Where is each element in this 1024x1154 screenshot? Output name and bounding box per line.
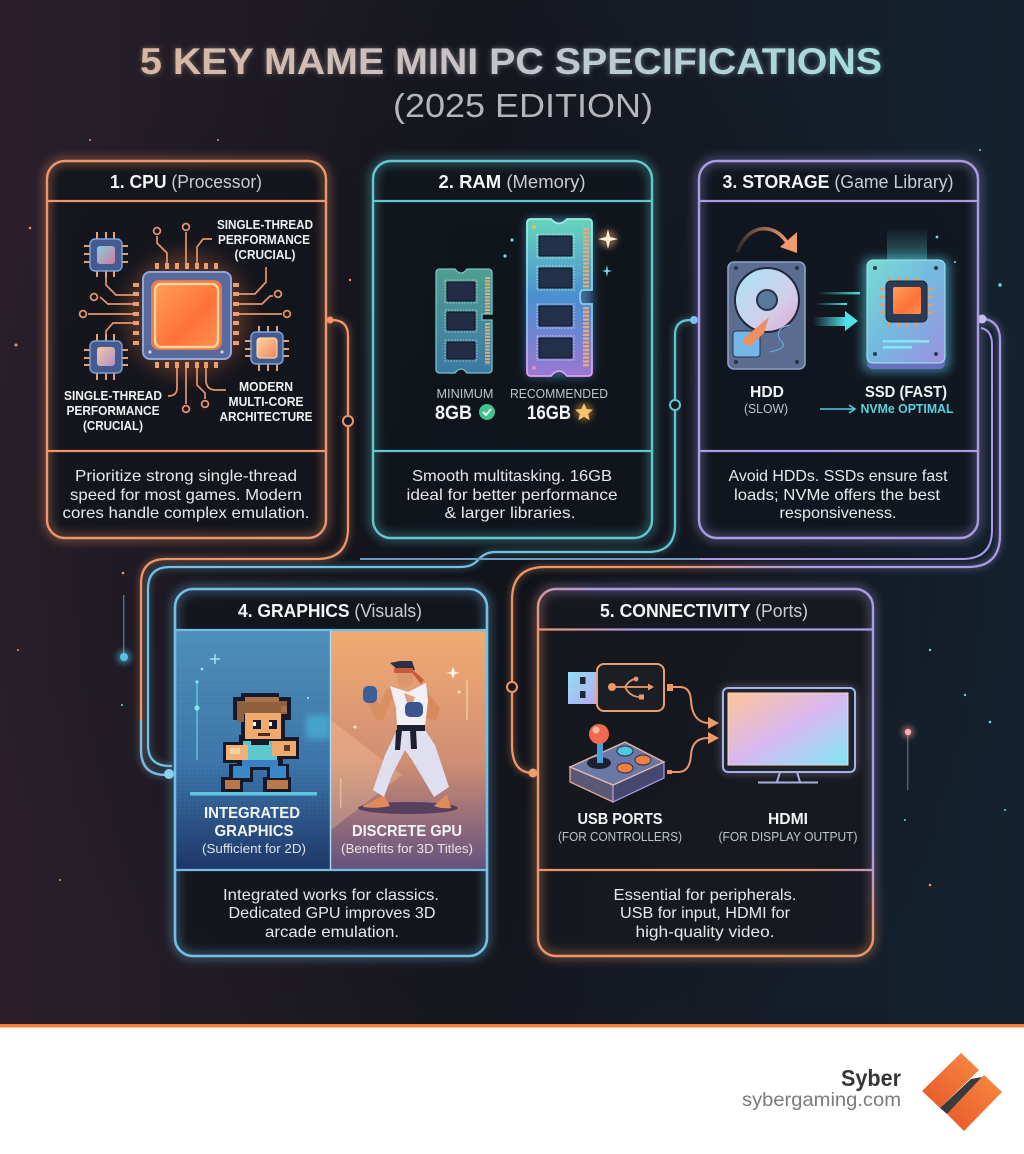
description: Storage: loads; NVMe offers the best bbox=[734, 487, 941, 504]
description: Storage: responsiveness. bbox=[780, 505, 896, 522]
label: modern multi-core: MULTI-CORE bbox=[228, 395, 304, 409]
label: integrated graphics bbox=[202, 805, 306, 856]
panel: Storage bbox=[699, 161, 978, 538]
label: recommended 16GB bbox=[510, 387, 608, 424]
heading: Connectivity: 5. CONNECTIVITY (Ports) bbox=[600, 601, 808, 621]
panel: integrated graphics bbox=[175, 630, 330, 870]
label: HDMI bbox=[718, 811, 858, 844]
label: minimum 8GB bbox=[435, 387, 495, 424]
description: Graphics: arcade emulation. bbox=[265, 924, 399, 941]
brand name: Syber bbox=[841, 1065, 901, 1091]
heading: RAM: 2. RAM (Memory) bbox=[438, 172, 586, 192]
description: Connectivity: Essential for peripherals. bbox=[614, 887, 796, 904]
description: CPU: Prioritize strong single-thread bbox=[75, 468, 297, 485]
label: USB ports: USB PORTS bbox=[578, 811, 662, 828]
title: 5 KEY MAME MINI PC SPECIFICATIONS bbox=[140, 41, 882, 82]
panel: Connectivity bbox=[538, 589, 873, 956]
icon: HDD bbox=[728, 229, 805, 369]
label: recommended 16GB: RECOMMENDED bbox=[510, 387, 608, 401]
label: integrated graphics: (Sufficient for 2D) bbox=[202, 842, 306, 856]
label: integrated graphics: GRAPHICS bbox=[214, 823, 294, 840]
description: RAM: Smooth multitasking. 16GB bbox=[412, 468, 612, 485]
icon: small chip top left bbox=[84, 232, 128, 277]
label: single-thread bottom: SINGLE-THREAD bbox=[64, 389, 162, 403]
icon: sparkles bbox=[503, 229, 618, 277]
connector: Storage to Graphics bbox=[148, 316, 698, 766]
label: HDMI: (FOR DISPLAY OUTPUT) bbox=[718, 830, 858, 844]
icon: USB connector bbox=[568, 664, 664, 711]
label: USB ports bbox=[558, 811, 682, 844]
label: discrete GPU: DISCRETE GPU bbox=[352, 823, 462, 840]
icon: small 8GB RAM stick bbox=[436, 269, 492, 373]
icon: pixel fighter bbox=[221, 693, 299, 792]
heading: Graphics: 4. GRAPHICS (Visuals) bbox=[238, 601, 422, 621]
label: HDMI: HDMI bbox=[768, 811, 808, 828]
label: single-thread top: (CRUCIAL) bbox=[234, 248, 296, 262]
icon: gold star bbox=[575, 403, 593, 421]
title bbox=[140, 41, 882, 124]
description: CPU: cores handle complex emulation. bbox=[62, 505, 310, 522]
description: CPU: speed for most games. Modern bbox=[70, 487, 302, 504]
connector: CPU to Graphics bbox=[141, 316, 353, 779]
icon: logo bbox=[922, 1053, 1002, 1131]
label: SSD fast bbox=[820, 384, 954, 416]
label: minimum 8GB: MINIMUM bbox=[436, 387, 494, 401]
heading: Storage: 3. STORAGE (Game Library) bbox=[722, 172, 954, 192]
background particles bbox=[14, 139, 1006, 886]
label: HDD slow bbox=[744, 384, 788, 416]
description: RAM: ideal for better performance bbox=[406, 487, 618, 504]
label: SSD fast: NVMe OPTIMAL bbox=[860, 402, 954, 416]
description: Graphics: Dedicated GPU improves 3D bbox=[228, 905, 436, 922]
description: Graphics: Integrated works for classics. bbox=[223, 887, 439, 904]
connector: Storage to Connectivity bbox=[360, 314, 1000, 778]
panel: CPU bbox=[47, 161, 326, 538]
label: single-thread top: PERFORMANCE bbox=[218, 233, 310, 247]
label: modern multi-core: ARCHITECTURE bbox=[220, 410, 312, 424]
title: (2025 EDITION) bbox=[393, 87, 653, 124]
label: single-thread bottom: PERFORMANCE bbox=[66, 404, 160, 418]
description: RAM: & larger libraries. bbox=[444, 505, 576, 522]
icon: karate fighter bbox=[358, 661, 458, 814]
label: integrated graphics: INTEGRATED bbox=[204, 805, 300, 822]
brand url: sybergaming.com bbox=[742, 1089, 901, 1111]
icon: green check bbox=[479, 404, 495, 420]
icon: small chip right bbox=[245, 326, 289, 371]
description: Storage: Avoid HDDs. SSDs ensure fast bbox=[728, 468, 948, 485]
label: HDD slow: HDD bbox=[750, 384, 784, 401]
label: modern multi-core: MODERN bbox=[239, 380, 293, 394]
icon: arcade joystick bbox=[570, 724, 664, 802]
icon: SSD bbox=[862, 227, 956, 372]
description: Connectivity: high-quality video. bbox=[636, 924, 774, 941]
label: HDD slow: (SLOW) bbox=[744, 402, 788, 416]
label: single-thread bottom: (CRUCIAL) bbox=[83, 419, 143, 433]
label: discrete GPU: (Benefits for 3D Titles) bbox=[341, 842, 473, 856]
label: minimum 8GB: 8GB bbox=[435, 403, 472, 424]
icon: large 16GB RAM stick bbox=[527, 219, 592, 376]
arrow: to NVMe bbox=[820, 405, 855, 413]
label: USB ports: (FOR CONTROLLERS) bbox=[558, 830, 682, 844]
panel: Graphics bbox=[175, 589, 487, 956]
heading: CPU: 1. CPU (Processor) bbox=[110, 172, 262, 192]
panel: discrete GPU bbox=[331, 630, 486, 870]
panel: RAM bbox=[373, 161, 652, 538]
label: recommended 16GB: 16GB bbox=[527, 403, 571, 424]
description: Connectivity: USB for input, HDMI for bbox=[620, 905, 791, 922]
label: SSD fast: SSD (FAST) bbox=[865, 384, 947, 401]
label: discrete GPU bbox=[341, 823, 473, 856]
arrow: HDD to SSD bbox=[813, 292, 860, 331]
icon: CPU chip with circuit traces bbox=[80, 224, 290, 412]
footer band bbox=[0, 1024, 1024, 1154]
icon: monitor bbox=[723, 688, 855, 782]
label: single-thread top: SINGLE-THREAD bbox=[217, 218, 313, 232]
title: 5 KEY MAME MINI PC SPECIFICATIONS bbox=[140, 41, 882, 82]
arrows: inputs to monitor bbox=[667, 684, 719, 774]
icon: small chip bottom left bbox=[84, 334, 128, 380]
